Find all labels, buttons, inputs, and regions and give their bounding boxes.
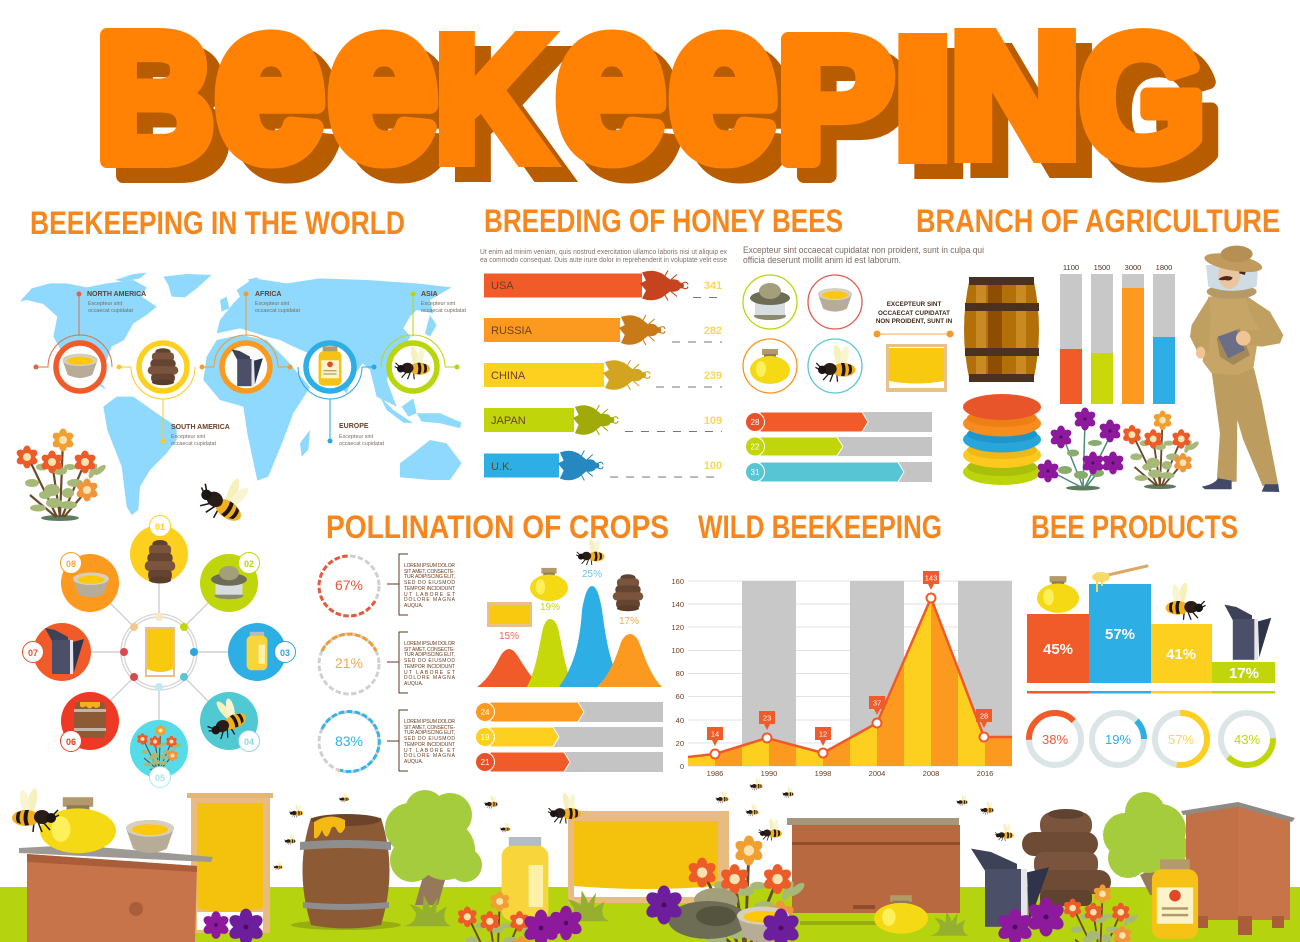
title xyxy=(96,0,1222,220)
icon: honey dipper xyxy=(1092,566,1147,592)
bar: china: CHINA xyxy=(491,370,526,382)
callout: europe: Excepteur sint xyxy=(339,434,374,440)
vertical bar chart: 1100 xyxy=(1063,263,1079,272)
chart: wild beekeeping: 28 xyxy=(980,712,988,720)
icon: purple flowers xyxy=(1036,408,1125,490)
tall frame xyxy=(187,793,273,933)
title: I xyxy=(892,4,953,194)
barrel xyxy=(291,814,401,930)
callout: north america: occaecat cupidatat xyxy=(88,308,133,314)
line xyxy=(688,598,1012,757)
item 02 xyxy=(200,552,260,612)
intro text: ea commodo consequat. Duis aute irure dolor in reprehenderit in voluptate velit esse xyxy=(480,257,727,264)
axis labels xyxy=(671,577,684,771)
right flowers xyxy=(996,884,1139,942)
donut 19: 19% xyxy=(1105,732,1131,747)
stat 21: SIT AMET, CONSECTE- xyxy=(404,647,455,653)
chart: wild beekeeping: 12 xyxy=(819,730,827,738)
stat 83 xyxy=(319,710,456,772)
bar 24 xyxy=(476,702,663,722)
title: N xyxy=(950,0,1081,193)
icon: bee xyxy=(576,538,604,565)
stat 21: DOLORE MAGNA xyxy=(404,675,456,681)
left flowers on grass xyxy=(457,891,540,942)
heading: beekeeping in the world: BEEKEEPING IN THE WORLD xyxy=(30,205,405,241)
panel: apiary scene xyxy=(0,778,1300,942)
item 04: 04 xyxy=(244,737,254,747)
title: N xyxy=(966,12,1097,208)
heading: breeding of honey bees: BREEDING OF HONEY BEES xyxy=(484,203,843,239)
stat 67: SIT AMET, CONSECTE- xyxy=(404,569,455,575)
bar: japan xyxy=(484,405,722,435)
axis labels: 60 xyxy=(676,692,684,701)
icon: flying bee xyxy=(191,464,259,530)
left hive xyxy=(19,845,213,942)
chart: wild beekeeping: 2016 xyxy=(977,769,993,778)
item 02: 02 xyxy=(244,559,254,569)
stat 83: LOREM IPSUM DOLOR xyxy=(404,719,455,725)
progress bar 28 xyxy=(746,412,932,432)
axis labels: 20 xyxy=(676,739,684,748)
wide frame xyxy=(568,811,729,903)
title: I xyxy=(908,19,969,209)
stat 83: 83% xyxy=(335,733,363,749)
axis labels: 0 xyxy=(680,762,684,771)
title: K xyxy=(435,0,550,198)
progress bar 22: 22 xyxy=(751,442,760,452)
icon: smoker xyxy=(1224,605,1271,660)
heading: pollination of crops: POLLINATION OF CROPS xyxy=(326,509,669,545)
stat 83: TUR ADIPISCING ELIT, xyxy=(404,730,455,736)
stat 83: SED DO EIUSMOD xyxy=(404,736,455,742)
bar: usa: 341 xyxy=(704,280,722,292)
intro text xyxy=(743,245,984,265)
callout: south america: Excepteur sint xyxy=(171,434,206,440)
progress bar 28: 28 xyxy=(751,418,760,427)
callout: asia: ASIA xyxy=(421,291,438,298)
callout: north america: Excepteur sint xyxy=(88,301,123,307)
icon: honey frame xyxy=(886,344,947,392)
stat 67: UT LABORE ET xyxy=(404,592,455,598)
vertical bar chart: 1800 xyxy=(1156,263,1172,272)
item 03: 03 xyxy=(280,648,290,658)
bars xyxy=(1027,584,1275,683)
axis labels: 140 xyxy=(671,600,684,609)
title: K xyxy=(451,14,566,213)
bar: china xyxy=(484,360,722,390)
panel: pollination stats xyxy=(319,554,456,772)
callout: africa: occaecat cupidatat xyxy=(255,308,300,314)
chart: wild beekeeping: 143 xyxy=(925,574,937,582)
callout: south america xyxy=(116,343,230,447)
bar 19 xyxy=(476,727,663,747)
callout text: EXCEPTEUR SINT xyxy=(887,301,941,308)
smoker xyxy=(971,849,1049,927)
callout: africa: Excepteur sint xyxy=(255,301,290,307)
vertical bar chart xyxy=(1060,263,1175,404)
icon: skep xyxy=(613,574,643,611)
grass tufts xyxy=(403,890,969,936)
callout: asia: occaecat cupidatat xyxy=(421,308,466,314)
tree right xyxy=(1103,792,1188,895)
icon: beekeeper xyxy=(1190,246,1283,492)
callout: europe xyxy=(298,343,384,447)
purple flowers mid-left xyxy=(202,906,584,942)
progress bar 31: 31 xyxy=(751,468,760,477)
chart: wild beekeeping: 2004 xyxy=(869,769,885,778)
bar: uk: U.K. xyxy=(491,461,512,473)
item 01 xyxy=(130,516,188,584)
left jar xyxy=(40,797,116,853)
axis labels: 120 xyxy=(671,623,684,632)
intro text xyxy=(480,249,727,264)
stat 21: LOREM IPSUM DOLOR xyxy=(404,641,455,647)
icon: bowl in circle xyxy=(808,275,862,329)
bar: usa: USA xyxy=(491,280,514,292)
stat 21 xyxy=(319,632,456,694)
stat 21: SED DO EIUSMOD xyxy=(404,658,455,664)
bars: 17% xyxy=(1229,665,1259,682)
grid lines xyxy=(688,581,1012,766)
bar: russia: RUSSIA xyxy=(491,325,533,337)
bar: japan: 109 xyxy=(704,415,722,427)
left bowl xyxy=(126,820,174,853)
item 08: 08 xyxy=(66,559,76,569)
bar: russia xyxy=(484,315,722,345)
chart: pollination peaks xyxy=(477,538,662,687)
item 06 xyxy=(60,692,119,752)
panel: world map xyxy=(20,273,466,515)
icon: bee in circle xyxy=(808,339,862,393)
axis labels: 100 xyxy=(671,646,684,655)
progress bars: pollination xyxy=(476,702,663,772)
item 04 xyxy=(199,692,260,752)
left bee xyxy=(12,787,59,832)
bar 21 xyxy=(476,752,663,772)
icon: hat in circle xyxy=(743,275,797,329)
icon: stacked discs xyxy=(963,394,1041,485)
title: B xyxy=(96,0,215,200)
stat 67 xyxy=(319,554,456,616)
stat 21: TEMPOR INCIDIDUNT xyxy=(404,664,455,670)
title: P xyxy=(776,1,894,199)
stat 67: 67% xyxy=(335,577,363,593)
ground xyxy=(0,887,1300,942)
callout text: OCCAECAT CUPIDATAT xyxy=(878,310,950,317)
bars: 57% xyxy=(1105,626,1135,643)
callout: europe: EUROPE xyxy=(339,423,369,430)
icon: barrel xyxy=(964,277,1039,382)
callout: africa xyxy=(200,291,300,391)
icon: frame xyxy=(487,602,532,627)
donut 38: 38% xyxy=(1042,732,1068,747)
callout: asia xyxy=(381,291,466,391)
icon: orange flowers xyxy=(1122,410,1200,489)
center purple flowers xyxy=(644,885,801,942)
heading: bee products: BEE PRODUCTS xyxy=(1031,509,1238,545)
center flowers xyxy=(687,836,806,942)
donut 38 xyxy=(1029,713,1081,765)
item 01: 01 xyxy=(155,522,165,532)
chart: wild beekeeping xyxy=(671,571,1012,778)
chart: wild beekeeping: 14 xyxy=(711,730,719,738)
chart: pollination peaks: 25% xyxy=(582,569,602,580)
bars: 41% xyxy=(1166,646,1196,663)
hat on ground xyxy=(668,888,748,939)
bar: usa xyxy=(484,270,722,300)
chart: pollination peaks: 15% xyxy=(499,631,519,642)
chart: wild beekeeping: 23 xyxy=(763,714,771,722)
area xyxy=(688,603,1012,766)
big skep xyxy=(1022,809,1111,906)
stat 67: SED DO EIUSMOD xyxy=(404,580,455,586)
panel: radial hive diagram xyxy=(22,516,296,788)
chart: wild beekeeping: 1998 xyxy=(815,769,831,778)
bar 24: 24 xyxy=(481,708,490,717)
progress bar 22 xyxy=(746,437,932,456)
chart: wild beekeeping: 1990 xyxy=(761,769,777,778)
data points xyxy=(710,594,988,758)
callout text xyxy=(876,301,953,325)
title: P xyxy=(792,16,910,214)
item 07 xyxy=(22,623,91,681)
item 05 xyxy=(130,720,188,788)
stat 83: UT LABORE ET xyxy=(404,748,455,754)
title: G xyxy=(1079,0,1206,197)
panel: breeding bars xyxy=(480,249,727,480)
donut 19 xyxy=(1081,702,1155,776)
stat 21: UT LABORE ET xyxy=(404,670,455,676)
icon: jar xyxy=(1037,576,1079,613)
panel: branch of agriculture xyxy=(743,245,1283,492)
stat 67: LOREM IPSUM DOLOR xyxy=(404,563,455,569)
bars: 45% xyxy=(1043,641,1073,658)
tall hive xyxy=(1181,802,1295,935)
chart: wild beekeeping: 2008 xyxy=(923,769,939,778)
stat 67: TUR ADIPISCING ELIT, xyxy=(404,574,455,580)
chart: pollination peaks: 19% xyxy=(540,602,560,613)
title: B xyxy=(112,11,231,215)
icon: jar in circle xyxy=(743,339,797,393)
bar: russia: 282 xyxy=(704,325,722,337)
stat 21: 21% xyxy=(335,655,363,671)
progress bar 31 xyxy=(746,462,932,482)
axis labels: 160 xyxy=(671,577,684,586)
stat 67: TEMPOR INCIDIDUNT xyxy=(404,586,455,592)
intro text: Ut enim ad minim veniam, quis nostrud exercitation ullamco laboris nisi ut aliquip ex xyxy=(480,249,727,256)
bar 21: 21 xyxy=(481,758,490,767)
grey bands xyxy=(742,581,1012,766)
bar: china: 239 xyxy=(704,370,722,382)
bowl on ground xyxy=(737,906,789,942)
callout: south america: SOUTH AMERICA xyxy=(171,424,230,431)
callout: asia: Excepteur sint xyxy=(421,301,456,307)
vertical bar chart: 1500 xyxy=(1094,263,1110,272)
stat 67: DOLORE MAGNA xyxy=(404,597,456,603)
donut 57: 57% xyxy=(1168,732,1194,747)
stat 83: TEMPOR INCIDIDUNT xyxy=(404,742,455,748)
callout: north america xyxy=(34,291,146,391)
map continents xyxy=(20,273,462,515)
stat 83: SIT AMET, CONSECTE- xyxy=(404,725,455,731)
item 05: 05 xyxy=(155,773,165,783)
tree left xyxy=(385,790,482,905)
stat 21: TUR ADIPISCING ELIT, xyxy=(404,652,455,658)
item 06: 06 xyxy=(66,737,76,747)
intro text: officia deserunt mollit anim id est laborum. xyxy=(743,255,901,265)
donut 43 xyxy=(1221,713,1273,765)
item 08 xyxy=(60,552,119,612)
chart: wild beekeeping: 37 xyxy=(873,698,881,708)
spokes and hub xyxy=(91,582,228,720)
axis labels: 80 xyxy=(676,669,684,678)
item 03 xyxy=(228,623,296,681)
intro text: Excepteur sint occaecat cupidatat non proident, sunt in culpa qui xyxy=(743,245,984,255)
mid jar xyxy=(874,895,928,934)
bar 19: 19 xyxy=(481,733,490,742)
callout: north america: NORTH AMERICA xyxy=(87,291,146,298)
callout: africa: AFRICA xyxy=(255,291,281,298)
bar: japan: JAPAN xyxy=(491,415,526,427)
vertical bar chart: 3000 xyxy=(1125,263,1141,272)
title: G xyxy=(1095,15,1222,212)
callout text: NON PROIDENT, SUNT IN xyxy=(876,318,953,325)
callout: europe: occaecat cupidatat xyxy=(339,441,384,447)
icon: jar xyxy=(530,568,568,601)
bar: uk: 100 xyxy=(704,460,722,472)
panel: bee products xyxy=(1027,566,1275,776)
callout: south america: occaecat cupidatat xyxy=(171,441,216,447)
icon: bee xyxy=(1166,582,1206,620)
chart: pollination peaks: 17% xyxy=(619,616,639,627)
stat 67: AUQUA. xyxy=(404,603,423,609)
bar: uk xyxy=(484,450,722,480)
stat 21: AUQUA. xyxy=(404,681,423,687)
icon: center frame xyxy=(145,627,175,677)
donut 57 xyxy=(1155,713,1207,765)
heading: wild beekeeping: WILD BEEKEEPING xyxy=(698,509,942,545)
stat 83: DOLORE MAGNA xyxy=(404,753,456,759)
item 07: 07 xyxy=(28,648,38,658)
glass jar xyxy=(502,837,548,921)
colour strip xyxy=(1027,691,1275,694)
stat 83: AUQUA. xyxy=(404,759,423,765)
chart: wild beekeeping: 1986 xyxy=(707,769,723,778)
axis labels: 40 xyxy=(676,716,684,725)
callout connector xyxy=(874,330,954,338)
small bees xyxy=(273,778,1014,870)
icon: flowering bush xyxy=(15,428,107,521)
donut 43: 43% xyxy=(1234,732,1260,747)
label jar xyxy=(1152,859,1198,939)
flags xyxy=(707,571,992,746)
big hive xyxy=(787,818,960,925)
